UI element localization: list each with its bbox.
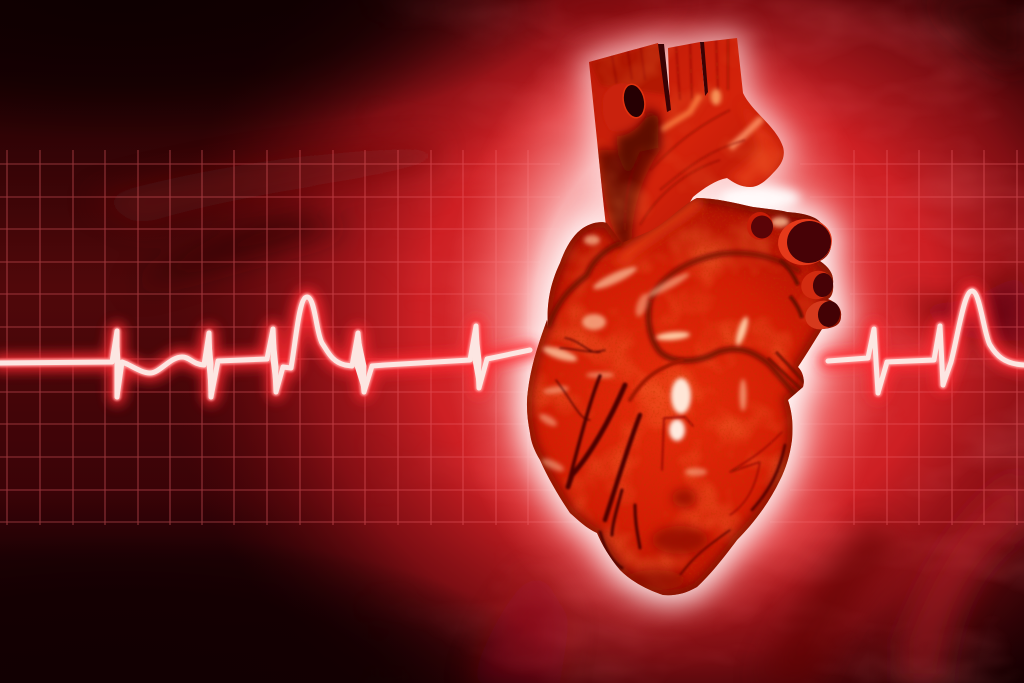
coronary vessels (556, 338, 785, 575)
dark recess beside stump (616, 112, 658, 180)
white glow between aorta and body (720, 186, 800, 210)
vessel shading (597, 105, 660, 255)
pulmonary veins and openings (747, 212, 843, 334)
heart halo glow (443, 7, 893, 643)
orange mottling (527, 220, 833, 591)
lobe separations (548, 243, 622, 327)
ECG trace left (0, 297, 530, 397)
ECG trace right (828, 291, 1024, 393)
slits between vessels (658, 44, 671, 112)
icon: vessel opening (620, 82, 648, 120)
edge shading (527, 198, 841, 595)
icon: middle vein opening (797, 266, 837, 304)
icon: large vein opening (775, 215, 835, 269)
fine speckle (520, 195, 850, 600)
ECG grid (0, 150, 1024, 525)
icon: lower vein opening (801, 296, 843, 334)
bright muscle highlights (537, 217, 789, 476)
icon: small vein opening (747, 212, 773, 240)
side vessel stump (603, 83, 645, 132)
heart body (520, 195, 850, 600)
dark apex patches (625, 489, 708, 590)
aorta and great vessels (589, 38, 789, 255)
